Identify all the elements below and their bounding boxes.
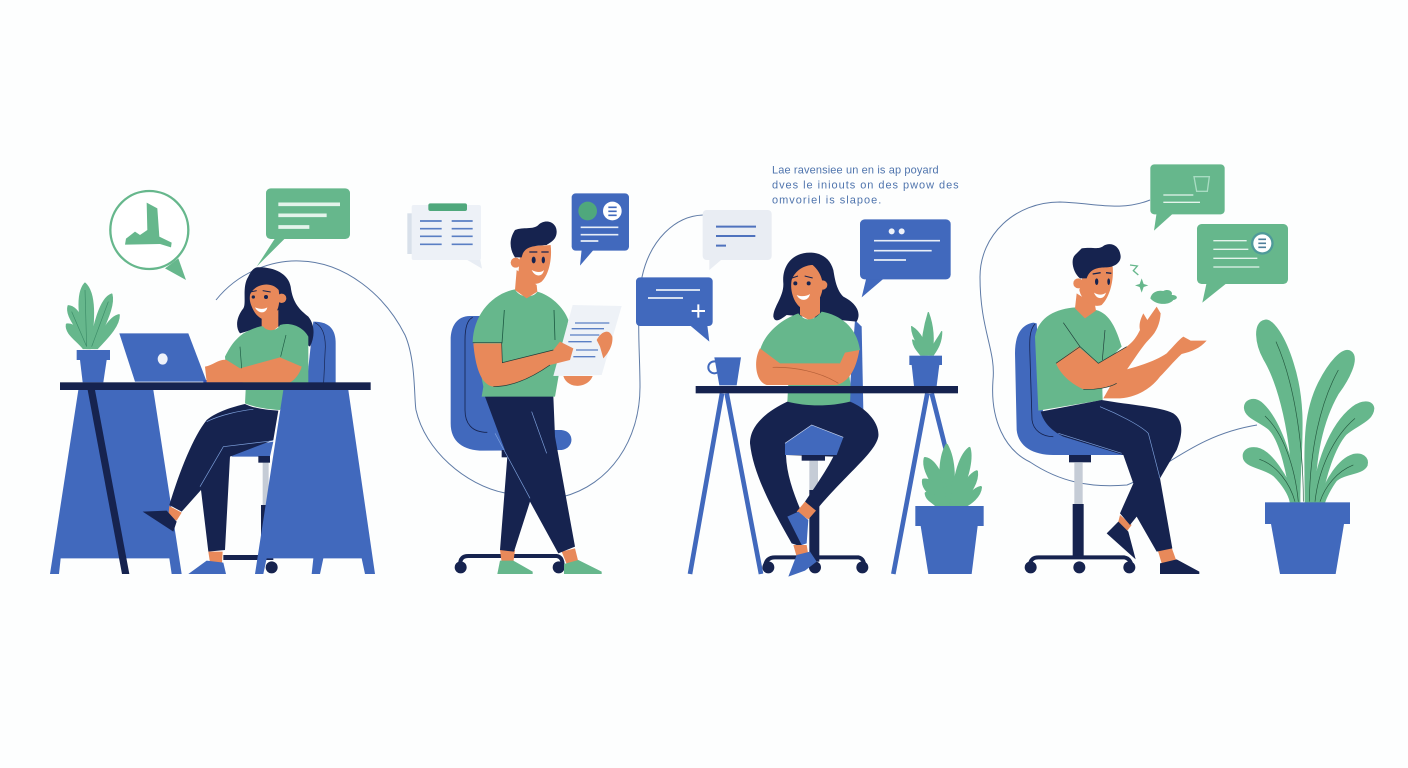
blue speech bubble — [860, 219, 951, 297]
desk top — [60, 382, 371, 390]
man figure — [473, 222, 622, 574]
desk right pedestal — [255, 390, 375, 574]
table top — [696, 386, 958, 393]
blue speech bubble with icons — [572, 193, 629, 266]
sparkles and floating idea — [1130, 265, 1177, 304]
scene 1: woman at laptop — [50, 188, 375, 574]
scene 2: man reading a document — [407, 193, 629, 574]
desk left pedestal — [50, 390, 182, 574]
chair back — [307, 322, 336, 390]
table legs — [690, 393, 948, 574]
caption text: Lae ravensiee un en is ap poyard — [772, 165, 939, 177]
coffee cup — [708, 357, 741, 385]
gray speech bubble — [703, 210, 772, 270]
chair — [762, 320, 868, 573]
woman figure — [750, 253, 878, 577]
office chair — [1015, 323, 1135, 573]
scene 3: woman at table — [636, 165, 984, 577]
small potted plant — [909, 313, 942, 386]
connector curves — [216, 200, 1257, 497]
scene 4: man gesturing — [1015, 164, 1372, 574]
potted plant on desk — [67, 283, 119, 382]
green speech bubble — [257, 188, 350, 267]
woman figure — [143, 267, 314, 574]
floor potted plant — [915, 445, 984, 574]
caption text: dves le iniouts on des pwow des — [772, 180, 959, 192]
man figure — [1035, 244, 1207, 574]
laptop — [119, 333, 257, 383]
icon: circle speech bubble — [110, 191, 188, 280]
office chair — [451, 316, 571, 573]
document bubble — [407, 203, 482, 269]
green speech bubble with cup — [1150, 164, 1225, 231]
caption text: omvoriel is slapoe. — [772, 194, 881, 206]
large potted plant — [1245, 322, 1372, 574]
green speech bubble with badge — [1197, 224, 1288, 303]
blue speech bubble with plus — [636, 277, 713, 342]
